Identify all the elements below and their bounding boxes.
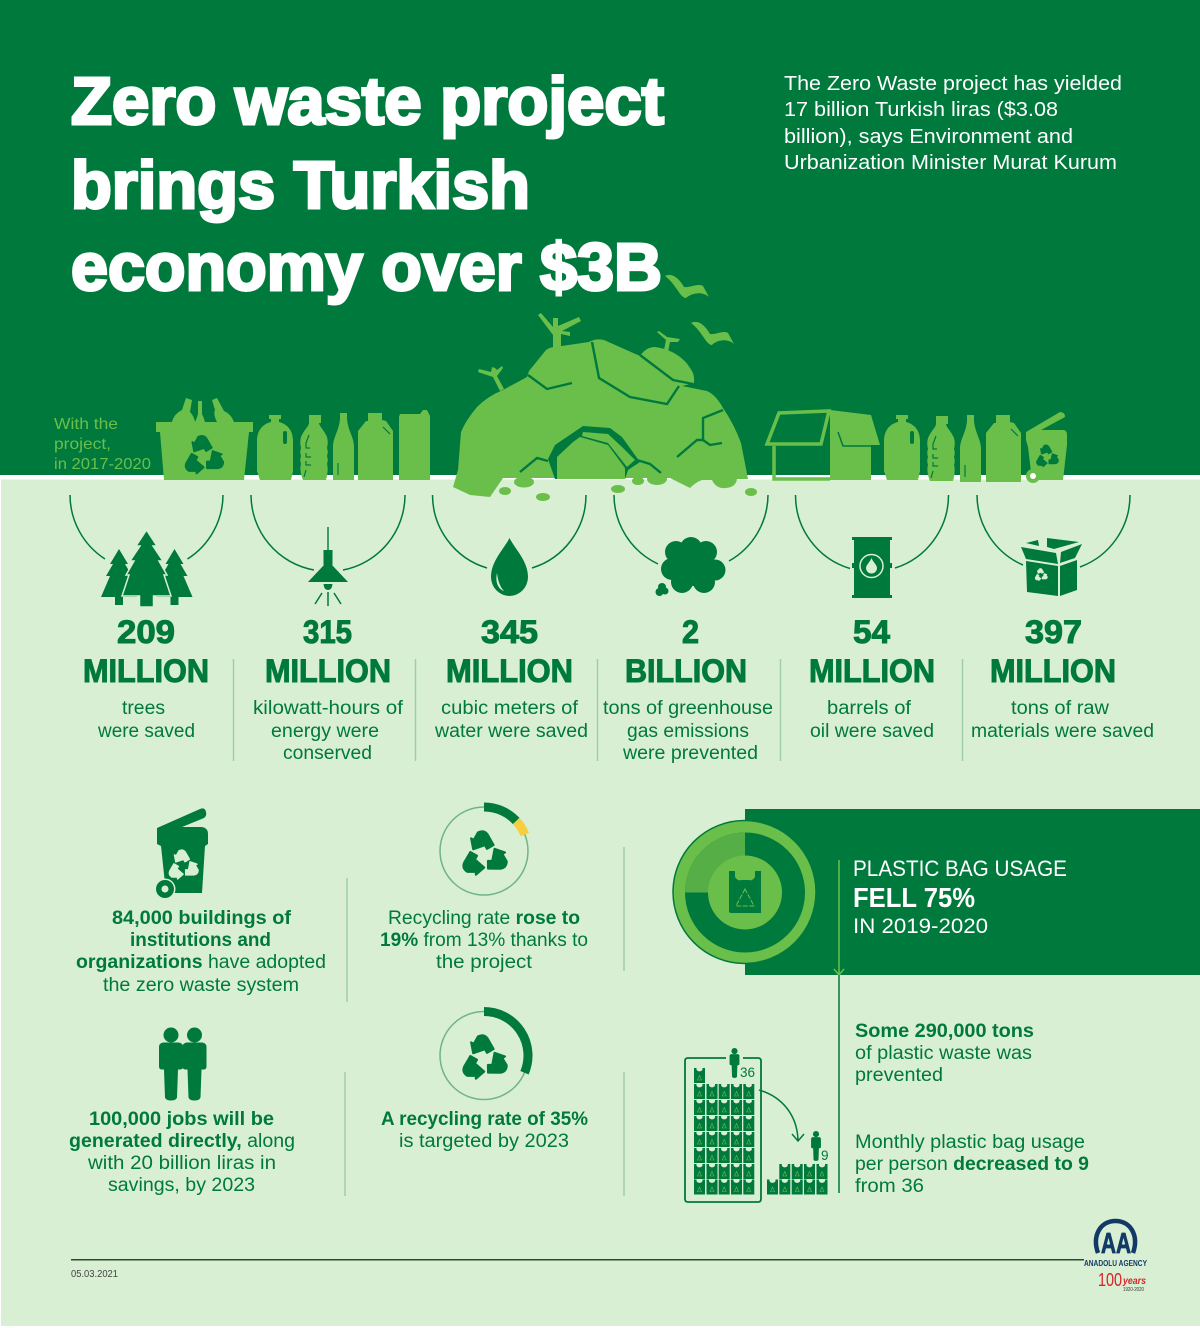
description: with 20 billion liras in [87, 1153, 276, 1174]
icon: recycling bin [154, 808, 208, 900]
description [76, 908, 326, 996]
description: trees [122, 698, 165, 719]
icon: emission cloud [656, 537, 726, 596]
description: 84,000 buildings of [112, 908, 292, 929]
icon: lamp [308, 527, 348, 606]
pictogram: 36 bags per person [685, 1048, 761, 1202]
logo: Anadolu Agency [1084, 1221, 1147, 1293]
icon: small recycling bin [1026, 412, 1067, 483]
description: materials were saved [971, 721, 1154, 742]
panel: recycling rate rise [380, 807, 588, 973]
unit: BILLION [625, 653, 747, 689]
description: conserved [283, 743, 372, 764]
unit: MILLION [446, 653, 573, 689]
icon: oil barrel [852, 537, 892, 598]
hill twigs [478, 313, 680, 391]
arc frame [977, 495, 1130, 567]
description [69, 1109, 295, 1196]
description: tons of raw [1011, 698, 1109, 719]
banner text: PLASTIC BAG USAGE [853, 856, 1067, 881]
description [253, 698, 404, 764]
illustration: waste hill [453, 313, 757, 501]
period label [54, 416, 151, 473]
description: oil were saved [810, 721, 934, 742]
text: monthly usage [855, 1132, 1089, 1197]
description [380, 908, 588, 973]
description: energy were [271, 721, 379, 742]
panel: raw materials saved [971, 495, 1154, 742]
panel: water saved [432, 495, 588, 742]
description: 19% from 13% thanks to [380, 930, 588, 951]
text: plastic waste prevented: prevented [855, 1065, 943, 1086]
logo: Anadolu Agency: 100 [1098, 1270, 1122, 1290]
icons: left row of bottles [257, 410, 430, 480]
arc frame [251, 495, 405, 570]
icon: trees [101, 530, 192, 607]
icon: recycling box [1021, 538, 1082, 596]
description [810, 698, 934, 742]
unit: MILLION [809, 653, 935, 689]
unit: MILLION [990, 653, 1116, 689]
text: plastic waste prevented [855, 1021, 1034, 1086]
value: 2 [682, 614, 699, 650]
description [97, 698, 195, 742]
description: A recycling rate of 35% [381, 1109, 588, 1130]
description: is targeted by 2023 [399, 1131, 569, 1152]
unit: MILLION [83, 653, 209, 689]
description [381, 1109, 588, 1152]
description: savings, by 2023 [108, 1175, 255, 1196]
description: kilowatt-hours of [253, 698, 404, 719]
description: were saved [97, 721, 195, 742]
panel: emissions prevented [603, 495, 773, 764]
description [971, 698, 1154, 742]
icons: birds [665, 275, 734, 345]
description: were prevented [622, 743, 758, 764]
arc frame [70, 495, 223, 559]
header band [0, 0, 1200, 475]
intro text: The Zero Waste project has yielded [784, 73, 1122, 95]
text: monthly usage: per person decreased to 9 [855, 1154, 1089, 1175]
value: 54 [853, 614, 890, 650]
period label: project, [54, 436, 111, 453]
arch band [548, 426, 640, 479]
side rocks [520, 458, 661, 473]
footer rule [71, 1259, 1084, 1260]
value: 397 [1025, 614, 1082, 650]
description: the zero waste system [103, 975, 299, 996]
value: 209 [117, 614, 175, 650]
icon: water drop [491, 538, 528, 596]
arc frame [432, 495, 586, 568]
intro text: Urbanization Minister Murat Kurum [784, 152, 1117, 174]
description: 100,000 jobs will be [89, 1109, 274, 1130]
value: 315 [303, 614, 352, 650]
arc frame [795, 495, 948, 568]
icons: right row of bottles [884, 415, 1021, 482]
description: organizations have adopted [76, 952, 326, 973]
logo: Anadolu Agency: years [1122, 1276, 1146, 1287]
description: water were saved [434, 721, 588, 742]
description: gas emissions [627, 721, 749, 742]
pictogram: 9 bags per person [767, 1131, 829, 1194]
description [434, 698, 588, 742]
title [71, 64, 664, 305]
banner text: IN 2019-2020 [853, 915, 988, 938]
icon: two people [159, 1028, 206, 1100]
panel: energy conserved [251, 495, 405, 764]
intro text: billion), says Environment and [784, 126, 1073, 148]
intro text [784, 73, 1122, 174]
period label: in 2017-2020 [54, 456, 151, 473]
description: institutions and [130, 930, 271, 951]
description: Recycling rate rose to [388, 908, 580, 929]
pictogram: 36 bags per person: 36 [740, 1065, 755, 1080]
logo: Anadolu Agency: AA [1101, 1228, 1131, 1260]
icon: recycling crate with bottles [156, 398, 253, 480]
text: plastic waste prevented: of plastic waste was [855, 1043, 1032, 1064]
donut chart: 75 percent [673, 820, 816, 964]
icon: plastic bag [729, 871, 761, 913]
arch inner rock [557, 437, 625, 479]
icon: open cardboard box [767, 410, 880, 480]
text: monthly usage: from 36 [855, 1176, 924, 1197]
pictogram: 9 bags per person: 9 [821, 1148, 829, 1163]
description: cubic meters of [441, 698, 579, 719]
description: the project [436, 952, 533, 973]
arch strip [582, 432, 635, 467]
text: plastic waste prevented: Some 290,000 tons [855, 1021, 1034, 1042]
banner text [853, 856, 1067, 938]
description [603, 698, 773, 764]
title: economy over $3B [71, 230, 662, 305]
intro text: 17 billion Turkish liras ($3.08 [784, 99, 1058, 121]
panel: recycling target [381, 1012, 588, 1152]
unit: MILLION [265, 653, 391, 689]
white ground strip [0, 475, 1200, 480]
description: generated directly, along [69, 1131, 295, 1152]
date: 05.03.2021 [71, 1269, 118, 1280]
arc frame [614, 495, 768, 564]
logo: Anadolu Agency: ANADOLU AGENCY [1084, 1258, 1147, 1268]
description: barrels of [827, 698, 912, 719]
period label: With the [54, 416, 118, 433]
banner text: FELL 75% [853, 882, 975, 913]
text: monthly usage: Monthly plastic bag usage [855, 1132, 1085, 1153]
panel: plastic bag banner [673, 809, 1200, 1193]
logo: Anadolu Agency: 1920-2020 [1123, 1287, 1144, 1293]
arrow: 36 down to 9 [759, 1090, 804, 1141]
panel: trees saved [70, 495, 223, 742]
panel: buildings adopted [76, 808, 326, 996]
ring gauge 13 to 19 percent [440, 807, 528, 895]
panel: oil saved [795, 495, 948, 742]
arrow [834, 860, 844, 1193]
value: 345 [481, 614, 538, 650]
hill debris [499, 473, 757, 501]
ring gauge 35 percent [440, 1012, 528, 1100]
title: brings Turkish [71, 148, 530, 223]
title: Zero waste project [71, 64, 664, 139]
description: tons of greenhouse [603, 698, 773, 719]
panel: jobs generated [69, 1028, 295, 1196]
